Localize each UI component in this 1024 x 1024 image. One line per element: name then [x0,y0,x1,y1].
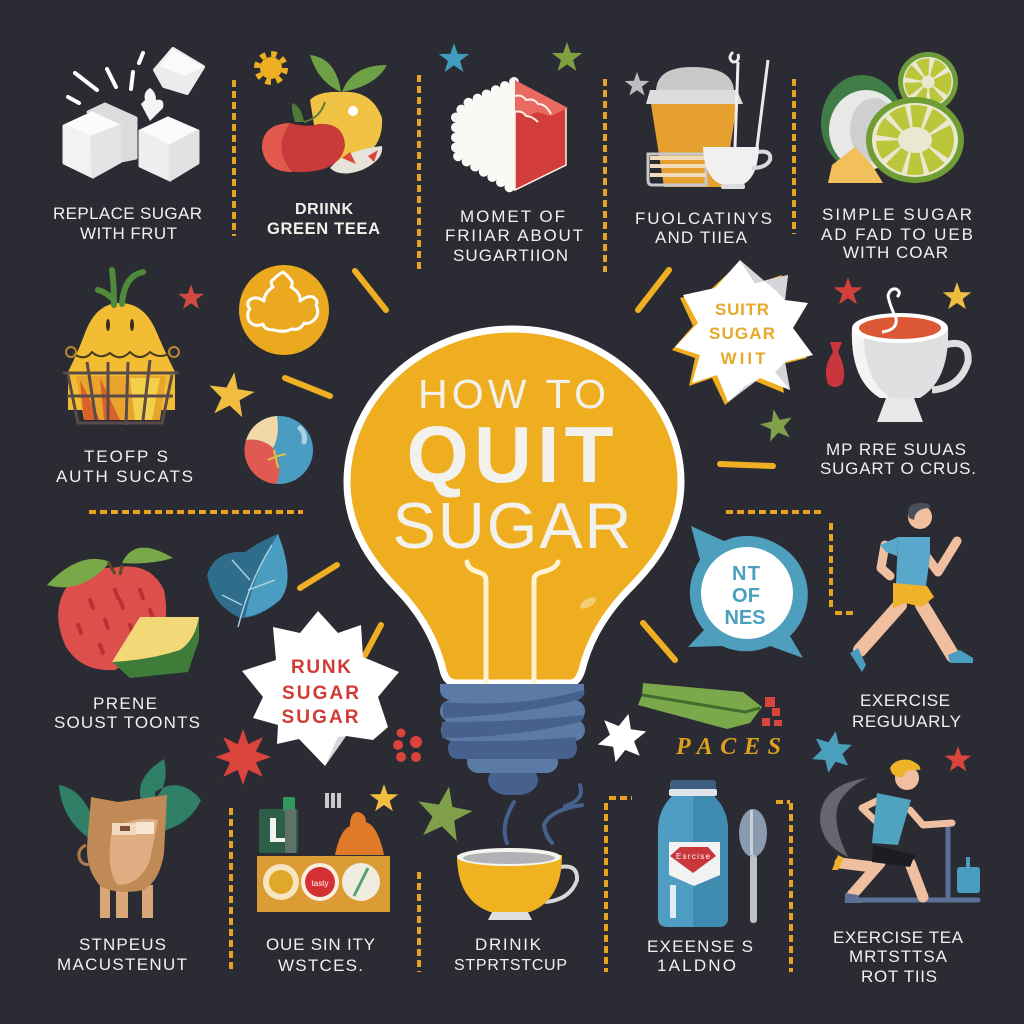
callout: suitr sugar [672,260,813,405]
icon: red burst star [215,729,271,785]
icon: green vegetable [638,683,782,729]
panel: apple and melon: SOUST TOONTS [54,713,200,732]
icon: yellow star [370,784,398,811]
icon: steam [505,785,582,843]
panel: drink stretch cup: DRINIK [475,935,542,954]
icon: treadmill runner [820,760,980,903]
panel: fluctuating tea: AND TIIEA [655,228,748,247]
panel: paces [595,683,782,768]
icon: teal star [810,728,854,776]
panel: replace sugar with fruit: REPLACE SUGAR [53,204,202,223]
panel: sprout character: STNPEUS [79,935,166,954]
panel: sugar cube fact: MOMET OF [460,207,565,226]
panel: exercise regularly: EXERCISE [860,691,950,710]
panel: treadmill: EXERCISE TEA [833,928,964,947]
panel: drink stretch cup: STPRTSTCUP [454,957,567,974]
icon: blue star [439,43,469,72]
panel: drink green tea: DRIINK [295,201,353,218]
icon: bottle: Esrcise [676,852,711,861]
icon: yellow star [943,282,971,309]
icon: ball [244,416,313,484]
central light bulb [347,329,681,795]
callout: runk sugar: SUGAR [282,683,359,704]
icon: small red star [945,746,971,771]
callout: suitr sugar: WIIT [720,349,766,368]
icon: apple with melon slice [47,548,199,678]
icon: grey sticks [327,793,339,808]
panel: replace sugar with fruit [53,49,203,243]
panel: treadmill: MRTSTTSA [849,947,948,966]
callout: speech bubble: NT [732,563,760,585]
icon: green star [552,42,582,71]
icon: half red sugar cube [456,80,568,190]
icon: pear in basket [63,270,179,425]
panel: sugar cube fact [439,42,583,265]
panel: hot cup [758,277,976,478]
icon: orange figure [335,812,384,855]
icon: sun [257,54,285,82]
icon: tray with labels: tasty [312,879,328,888]
panel: paces: PACES [675,734,781,760]
panel: simple sugar: WITH COAR [843,243,948,262]
icon: green star [413,782,476,843]
panel: drink green tea [257,54,387,238]
panel: drink green tea: GREEN TEEA [267,220,380,238]
panel: treadmill [820,760,980,986]
icon: grey star [625,72,649,96]
title: SUGAR [392,489,632,562]
icon: runner [850,503,973,672]
panel: exercise regularly: REGUUARLY [852,712,961,731]
panel: bottle and spoon [647,780,767,975]
callout: speech bubble: NES [724,607,766,629]
panel: simple sugar: SIMPLE SUGAR [822,205,972,224]
icon: yellow medallion [239,265,329,355]
callout: runk sugar: RUNK [291,657,351,678]
icon: character with leaves [59,759,201,918]
panel: hot cup: SUGART O CRUS. [820,459,976,478]
panel: bottle and spoon: EXEENSE S [647,937,753,956]
callout: suitr sugar: SUITR [715,300,769,319]
panel: sugar cube fact: SUGARTIION [453,246,568,265]
panel: hot cup: MP RRE SUUAS [826,440,966,459]
panel: simple sugar: AD FAD TO UEB [821,225,973,244]
panel: sugar cube fact: FRIIAR ABOUT [445,226,583,245]
icon: spoon [739,809,767,923]
icon: citrus and coconut [821,52,964,183]
panel: exercise regularly [850,503,973,731]
panel: fluctuating tea: FUOLCATINYS [635,209,772,228]
icon: blue leaf [207,534,288,627]
panel: sin city: WSTCES. [278,956,363,975]
icon: red star [178,284,204,309]
panel: replace sugar with fruit: WITH FRUT [80,224,177,243]
icon: tea cup [826,289,968,422]
icon: tea cup [457,848,577,920]
panel: fruit basket: AUTH SUCATS [56,467,193,486]
icon: apples and leaves [262,55,387,174]
icon: red star [834,277,862,304]
panel: fruit basket: TEOFP S [84,447,168,466]
title: HOW TO [418,371,606,417]
callout: runk sugar: SUGAR [282,707,359,728]
panel: apple and melon: PRENE [93,694,157,713]
title [392,371,632,562]
panel: bottle and spoon: 1ALDNO [657,956,736,975]
icon: sugar cubes [64,49,203,180]
panel: drink stretch cup [413,782,582,974]
panel: fruit basket [56,270,204,486]
panel: sin city [257,784,398,975]
callout: speech bubble: OF [732,585,760,607]
icon: red ornament [393,728,422,762]
panel: simple sugar [821,52,973,262]
callout: runk sugar [242,611,399,766]
panel: apple and melon [47,548,200,732]
icon: green star [758,406,796,443]
title: QUIT [406,410,614,499]
icon: white star [595,708,649,768]
panel: sprout character [57,759,201,974]
icon: bottle [658,780,728,927]
panel: fluctuating tea [625,52,772,247]
panel: sprout character: MACUSTENUT [57,955,187,974]
callout: speech bubble [688,526,808,658]
panel: treadmill: ROT TIIS [861,967,937,986]
icon: yellow star [206,369,257,418]
icon: tea jar and cup [646,52,770,189]
icon: tray with labels [257,856,390,912]
callout: suitr sugar: SUGAR [709,324,775,343]
icon: bottles [259,797,298,853]
panel: sin city: OUE SIN ITY [266,935,375,954]
